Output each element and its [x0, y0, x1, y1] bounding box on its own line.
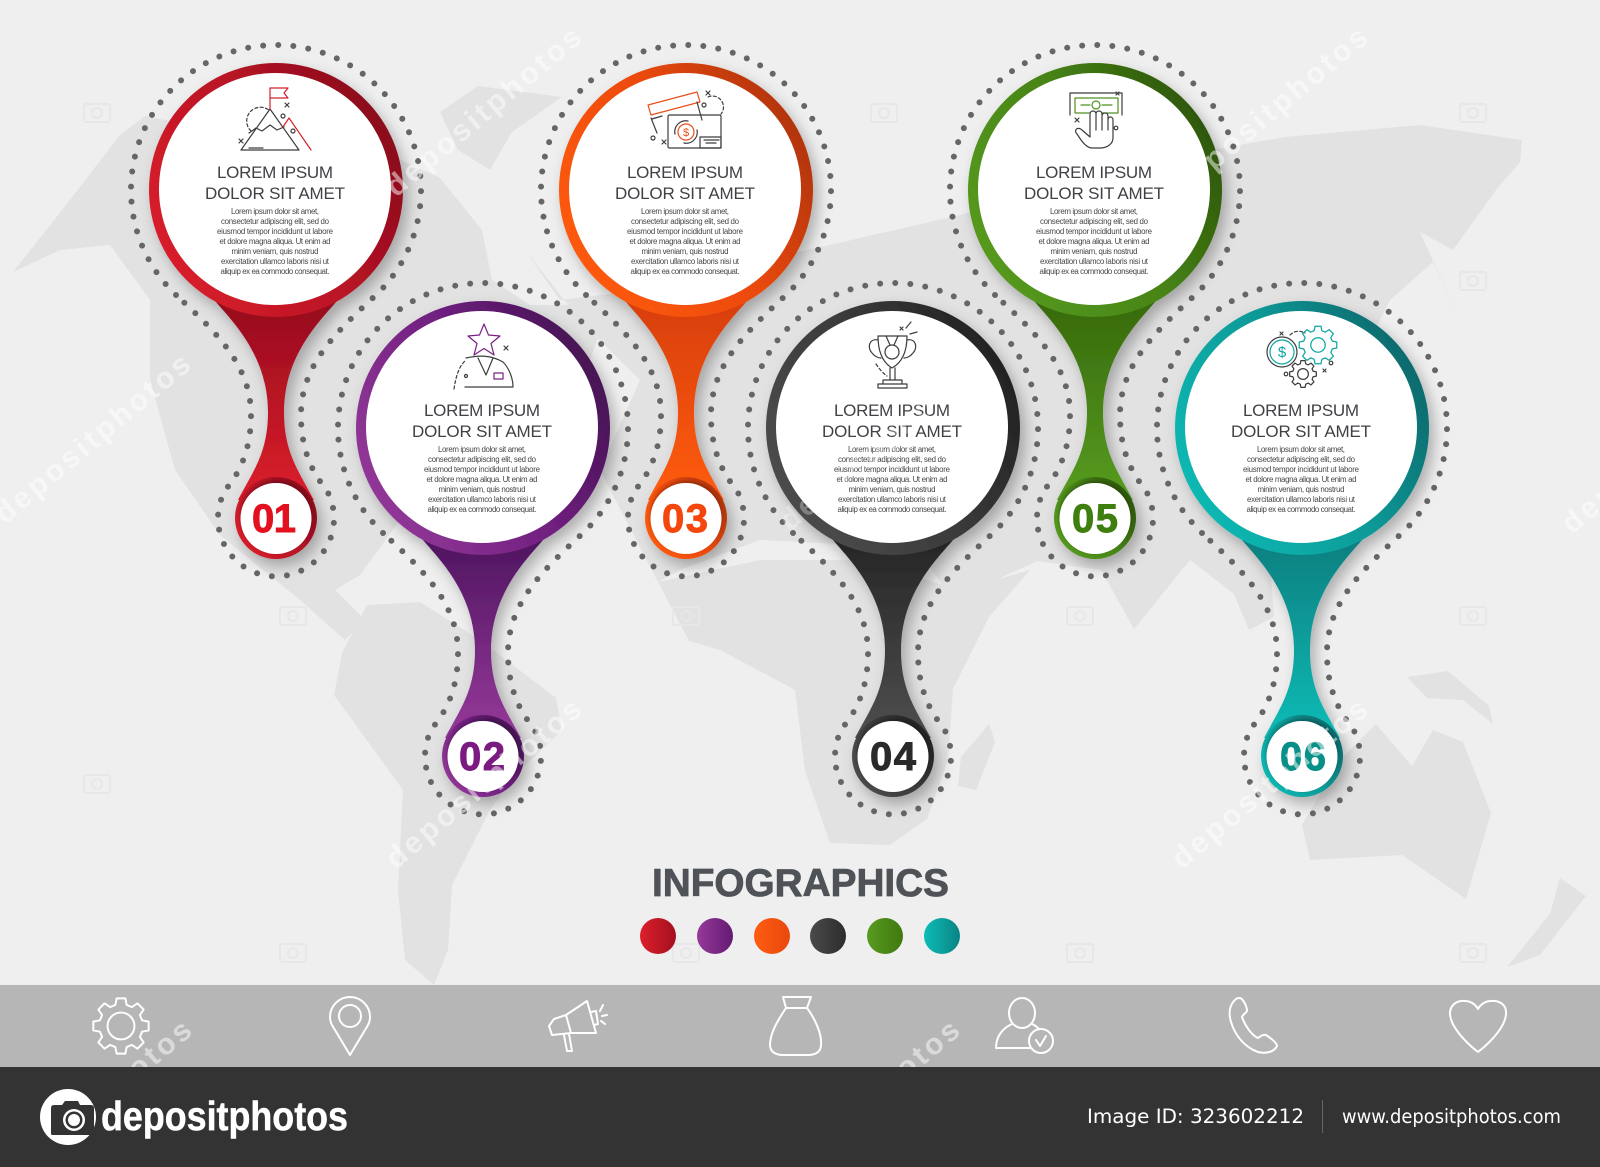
text block: exercitation ullamco laboris nisi ut: [631, 257, 740, 266]
text block: eiusmod tempor incididunt ut labore: [217, 227, 334, 236]
icon: user with check: [996, 998, 1053, 1053]
text block: eiusmod tempor incididunt ut labore: [834, 465, 951, 474]
legend colour dots: [640, 918, 960, 954]
text block: [1243, 445, 1360, 514]
text block: minim veniam, quis nostrud: [1258, 485, 1344, 494]
watermarks: depositphotos: [379, 21, 588, 203]
text block: Lorem ipsum dolor sit amet,: [231, 207, 319, 216]
text block: et dolore magna aliqua. Ut enim ad: [426, 475, 538, 484]
text block: et dolore magna aliqua. Ut enim ad: [1038, 237, 1150, 246]
text block: consectetur adipiscing elit, sed do: [221, 217, 330, 226]
watermarks: depositphotos: [1165, 21, 1374, 203]
icon: heart: [1450, 1001, 1506, 1052]
text block: exercitation ullamco laboris nisi ut: [838, 495, 947, 504]
heading: LOREM IPSUM: [834, 401, 950, 420]
text block: consectetur adipiscing elit, sed do: [838, 455, 947, 464]
text block: consectetur adipiscing elit, sed do: [1247, 455, 1356, 464]
text block: exercitation ullamco laboris nisi ut: [428, 495, 537, 504]
icon: hand with banknote: [1070, 92, 1122, 148]
text block: exercitation ullamco laboris nisi ut: [221, 257, 330, 266]
text block: eiusmod tempor incididunt ut labore: [1036, 227, 1153, 236]
heading: [822, 401, 962, 441]
panel: step 01: [131, 45, 421, 576]
text block: minim veniam, quis nostrud: [848, 485, 936, 494]
number 01: 01: [252, 497, 296, 541]
number 04: 04: [870, 735, 917, 779]
icon: mountain with flag: [239, 88, 311, 150]
heading: [615, 163, 755, 203]
text block: aliquip ex ea commodo consequat.: [631, 267, 739, 276]
world map: [13, 86, 1586, 985]
heading: DOLOR SIT AMET: [205, 184, 345, 203]
text block: et dolore magna aliqua. Ut enim ad: [836, 475, 948, 484]
icon: money bag: [770, 997, 821, 1055]
text block: minim veniam, quis nostrud: [438, 485, 526, 494]
icon band: [0, 985, 1600, 1067]
icon: megaphone: [549, 1001, 607, 1051]
icon: map pin: [330, 997, 370, 1055]
text block: minim veniam, quis nostrud: [1050, 247, 1138, 256]
text block: Lorem ipsum dolor sit amet,: [1050, 207, 1138, 216]
icon: star and uniform: [454, 324, 513, 389]
icon: dollar coin and gears: $: [1278, 344, 1287, 361]
text block: exercitation ullamco laboris nisi ut: [1247, 495, 1356, 504]
icon: credit card and payment: $: [683, 127, 689, 139]
text block: exercitation ullamco laboris nisi ut: [1040, 257, 1149, 266]
icon: trophy: [869, 322, 917, 388]
footer bar: [0, 1067, 1600, 1167]
number 02: 02: [459, 735, 505, 779]
panel: step 04: [748, 283, 1038, 814]
icon: gear: [93, 998, 149, 1054]
text block: [1036, 207, 1153, 276]
panel: step 03: [541, 45, 831, 576]
icon: phone: [1230, 998, 1277, 1053]
panel: step 02: [338, 283, 628, 814]
camera watermarks: [84, 104, 1486, 962]
text block: [627, 207, 744, 276]
icon: dollar coin and gears: [1267, 326, 1337, 387]
heading: LOREM IPSUM: [1036, 163, 1152, 182]
heading: DOLOR SIT AMET: [1024, 184, 1164, 203]
image id: Image ID: 323602212: [1087, 1105, 1304, 1128]
heading: [1231, 401, 1371, 441]
heading: LOREM IPSUM: [1243, 401, 1359, 420]
text block: Lorem ipsum dolor sit amet,: [848, 445, 936, 454]
heading: [412, 401, 552, 441]
footer logo: [40, 1089, 348, 1145]
icon: logo camera: [40, 1089, 96, 1145]
text block: eiusmod tempor incididunt ut labore: [424, 465, 541, 474]
panel: step 06: [1157, 283, 1447, 814]
watermarks: depositphotos: [773, 355, 982, 537]
text block: et dolore magna aliqua. Ut enim ad: [1246, 475, 1356, 484]
website url: www.depositphotos.com: [1342, 1105, 1561, 1128]
text block: consectetur adipiscing elit, sed do: [428, 455, 537, 464]
heading: DOLOR SIT AMET: [615, 184, 755, 203]
heading: DOLOR SIT AMET: [822, 422, 962, 441]
text block: eiusmod tempor incididunt ut labore: [1243, 465, 1360, 474]
logo wordmark: depositphotos: [101, 1093, 348, 1139]
text block: aliquip ex ea commodo consequat.: [428, 505, 536, 514]
text block: eiusmod tempor incididunt ut labore: [627, 227, 744, 236]
icon: credit card and payment: [648, 91, 723, 148]
title: INFOGRAPHICS: [652, 862, 949, 905]
text block: et dolore magna aliqua. Ut enim ad: [220, 237, 330, 246]
number 06: 06: [1280, 735, 1326, 779]
heading: [1024, 163, 1164, 203]
text block: [834, 445, 951, 514]
text block: aliquip ex ea commodo consequat.: [221, 267, 329, 276]
heading: LOREM IPSUM: [217, 163, 333, 182]
text block: aliquip ex ea commodo consequat.: [1040, 267, 1148, 276]
heading: DOLOR SIT AMET: [1231, 422, 1371, 441]
text block: aliquip ex ea commodo consequat.: [838, 505, 946, 514]
watermarks: depositphotos: [379, 693, 588, 875]
text block: consectetur adipiscing elit, sed do: [1040, 217, 1149, 226]
text block: Lorem ipsum dolor sit amet,: [1257, 445, 1345, 454]
number 03: 03: [662, 497, 708, 541]
heading: LOREM IPSUM: [627, 163, 743, 182]
text block: minim veniam, quis nostrud: [232, 247, 318, 256]
text block: Lorem ipsum dolor sit amet,: [438, 445, 526, 454]
panel: step 05: [950, 45, 1240, 576]
watermarks: depositphotos: [1165, 693, 1374, 875]
heading: [205, 163, 345, 203]
text block: [424, 445, 541, 514]
number 05: 05: [1072, 497, 1118, 541]
text block: consectetur adipiscing elit, sed do: [631, 217, 740, 226]
heading: DOLOR SIT AMET: [412, 422, 552, 441]
text block: et dolore magna aliqua. Ut enim ad: [630, 237, 740, 246]
text block: Lorem ipsum dolor sit amet,: [641, 207, 729, 216]
text block: [217, 207, 334, 276]
text block: minim veniam, quis nostrud: [642, 247, 728, 256]
text block: aliquip ex ea commodo consequat.: [1247, 505, 1355, 514]
heading: LOREM IPSUM: [424, 401, 540, 420]
